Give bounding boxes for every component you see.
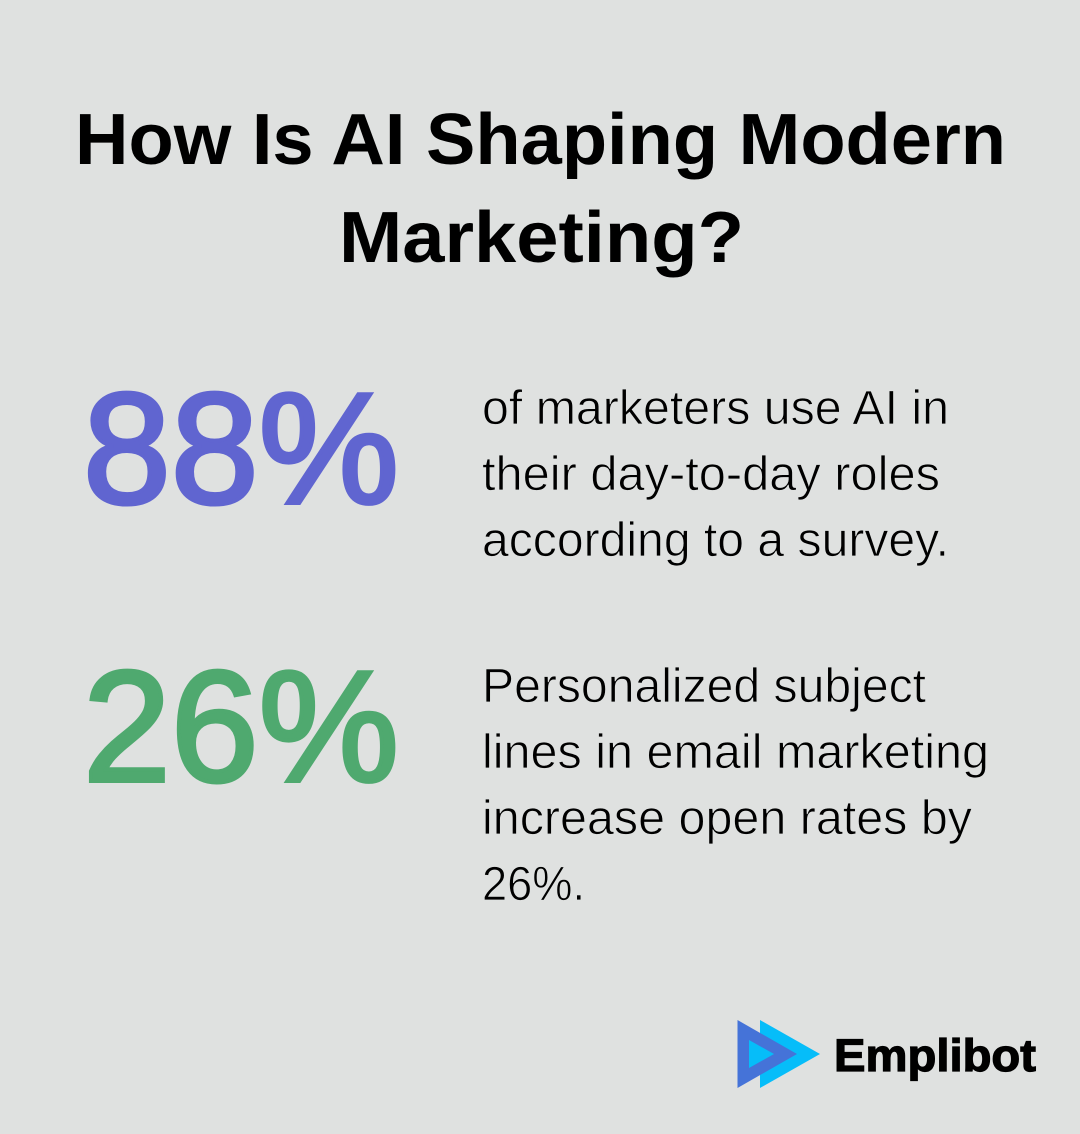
text block: 26% description: increase open rates by — [482, 792, 972, 845]
text block: 26% description: Personalized subject — [482, 660, 926, 713]
text block: 88% description: according to a survey. — [482, 514, 949, 567]
title: Marketing? — [339, 198, 744, 278]
title: How Is AI Shaping Modern — [75, 100, 1006, 180]
text block: 88% description — [482, 382, 949, 567]
logo wordmark: Emplibot — [834, 1030, 1036, 1081]
stat: 26%: 26% — [83, 639, 399, 815]
text block: 26% description — [482, 660, 989, 911]
text block: 26% description: lines in email marketing — [482, 726, 989, 779]
title — [75, 100, 1006, 278]
text block: 88% description: of marketers use AI in — [482, 382, 949, 435]
text block: 26% description: 26%. — [482, 858, 585, 911]
stat: 88%: 88% — [83, 361, 399, 537]
icon: play triangles — [738, 1020, 820, 1088]
text block: 88% description: their day-to-day roles — [482, 448, 940, 501]
logo: Emplibot — [738, 1020, 1036, 1088]
